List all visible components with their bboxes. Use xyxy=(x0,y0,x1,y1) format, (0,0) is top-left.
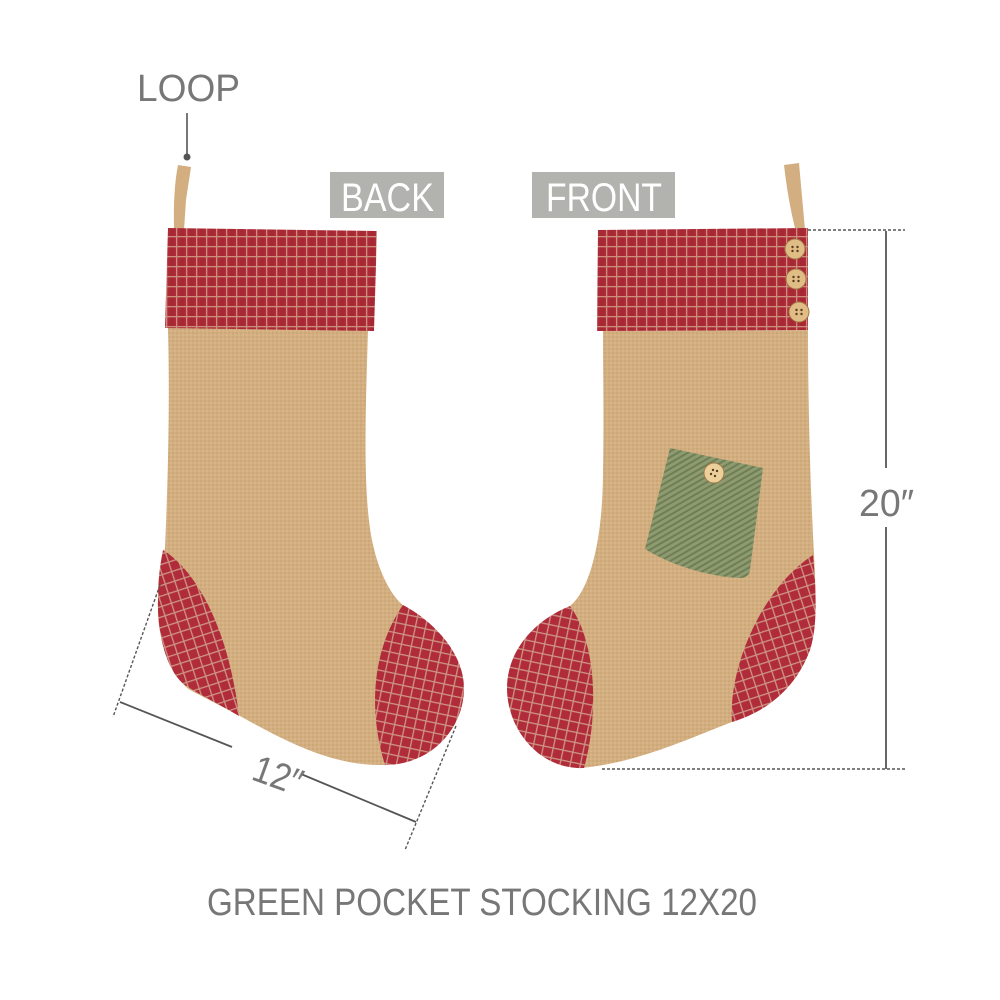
back cuff xyxy=(165,228,377,331)
label: loop: LOOP xyxy=(137,68,240,110)
pocket button xyxy=(704,463,724,483)
back heel patch xyxy=(158,550,239,716)
front cuff xyxy=(597,228,808,331)
caption: GREEN POCKET STOCKING 12X20 xyxy=(207,882,757,924)
front heel patch xyxy=(732,555,816,722)
label: front: FRONT xyxy=(546,176,662,220)
dimension: 20 inch height: 20″ xyxy=(859,483,914,525)
front toe patch xyxy=(507,606,593,768)
front body xyxy=(570,330,815,768)
label: back: BACK xyxy=(341,176,434,220)
dimension: 12 inch width: 12″ xyxy=(247,748,308,805)
back stocking xyxy=(158,165,464,765)
dimension: 12 inch width xyxy=(113,585,456,850)
cuff button 2 xyxy=(786,269,806,289)
label: loop xyxy=(137,68,240,160)
front loop xyxy=(784,163,805,230)
cuff button 1 xyxy=(785,239,805,259)
back loop xyxy=(174,165,191,230)
cuff button 3 xyxy=(789,302,809,322)
green pocket xyxy=(645,448,763,578)
back body xyxy=(158,328,404,765)
front stocking xyxy=(507,163,816,768)
back toe patch xyxy=(375,605,464,765)
